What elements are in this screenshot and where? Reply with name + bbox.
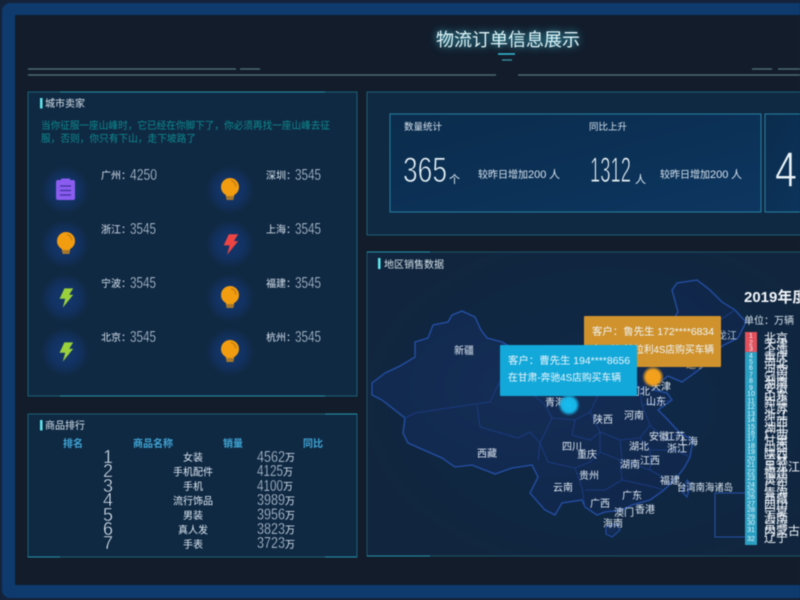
table rows: 2 <box>103 461 113 481</box>
city: 深圳 <box>206 166 321 214</box>
city: 广州: 广州： <box>101 170 131 182</box>
table rows: 7 <box>103 533 113 553</box>
table header: 排名 <box>63 437 83 450</box>
ranking names column: 台湾 <box>764 517 788 532</box>
table rows: 1 <box>103 447 113 467</box>
ranking names column: 福建 <box>764 465 788 480</box>
ranking unit: 单位：万辆 <box>744 314 794 327</box>
map: province labels: 福建 <box>660 474 680 487</box>
ranking index column: 7 <box>749 372 753 379</box>
tooltip: orange <box>584 316 721 367</box>
ranking names column: 河北 <box>764 357 788 371</box>
table rows: 3 <box>103 476 113 496</box>
table header: 销量 <box>223 437 243 450</box>
map marker: orange <box>642 366 664 388</box>
ranking names column: 吉林 <box>764 453 788 467</box>
table rows: 4100 <box>257 478 283 495</box>
table rows: 4562 <box>257 449 285 466</box>
map: province labels: 广东 <box>622 489 642 502</box>
ranking index column: 4 <box>749 353 753 360</box>
ranking names column: 广东 <box>764 479 788 493</box>
ranking names column: 浙江 <box>764 408 788 422</box>
city: 宁波: 3545 <box>130 275 156 292</box>
stat card <box>390 114 761 212</box>
stat: year on year: 200 <box>710 169 728 181</box>
tooltip: blue: 在甘肃-奔驰4S店购买车辆 <box>508 371 621 384</box>
city: 浙江 <box>41 220 156 268</box>
stat: quantity: 人 <box>549 168 560 181</box>
panel: product ranking <box>28 414 357 557</box>
table rows: 6 <box>103 519 113 539</box>
city: 北京: 北京： <box>101 331 131 344</box>
map: province labels: 黑龙江 <box>707 329 737 342</box>
map: province labels: 四川 <box>562 442 582 453</box>
ranking index column: 3 <box>749 346 753 353</box>
map: South China Sea inset <box>715 493 745 537</box>
ranking index column: 19 <box>747 449 755 456</box>
heading: product ranking: 商品排行 <box>45 419 85 432</box>
tooltip: blue: 客户：曹先生 194****8656 <box>508 354 630 367</box>
stat: year on year: 人 <box>635 173 646 186</box>
ranking index column: 15 <box>747 424 755 431</box>
map: province labels: 新疆 <box>454 344 474 357</box>
heading: city sellers: 城市卖家 <box>45 97 85 110</box>
city: 福建 <box>206 274 321 322</box>
ranking index column: 29 <box>747 514 755 521</box>
table rows: 4125 <box>257 463 283 480</box>
ranking index column: 5 <box>749 359 753 366</box>
ranking names column: 安徽 <box>764 381 788 396</box>
map: province labels: 西藏 <box>477 448 497 460</box>
map: province labels: 江苏 <box>665 430 685 443</box>
map: province labels: 云南 <box>553 481 573 494</box>
table rows: 3723 <box>257 535 285 552</box>
stat: quantity <box>403 121 560 190</box>
ranking names column <box>764 331 800 545</box>
ranking names column: 四川 <box>764 498 788 512</box>
ranking names column: 重庆 <box>764 350 788 364</box>
ranking index column: 1 <box>749 333 753 340</box>
ranking index column: 17 <box>747 436 755 443</box>
map: province labels: 天津 <box>651 381 671 393</box>
ranking index column: 22 <box>747 469 755 476</box>
map: province labels: 湖南 <box>620 458 640 471</box>
panel: statistics <box>367 92 800 235</box>
ranking names column: 西藏 <box>764 492 788 506</box>
city: 广州: 4250 <box>130 167 157 184</box>
ranking index column: 6 <box>749 365 753 372</box>
city: 杭州: 杭州： <box>266 331 296 344</box>
ranking names column: 广西 <box>764 428 788 442</box>
table rows: 万 <box>285 511 295 522</box>
city: 浙江: 3545 <box>130 221 156 238</box>
table rows: 真人发 <box>178 524 208 536</box>
ranking index column: 9 <box>749 385 753 392</box>
ranking names column: 宁夏 <box>764 504 788 519</box>
ranking names column: 湖北 <box>764 420 788 435</box>
city: 杭州: 3545 <box>295 329 321 346</box>
city: 宁波 <box>41 274 156 322</box>
table rows: 手表 <box>183 538 203 551</box>
ranking names column: 青海 <box>764 485 788 500</box>
table rows: 3823 <box>257 521 285 538</box>
map: province labels: 安徽 <box>649 430 669 443</box>
intro text: 当你征服一座山峰时，它已经在你脚下了，你必须再找一座山峰去征 <box>41 119 330 132</box>
ranking index column: 2 <box>749 340 753 347</box>
city: 浙江: 浙江： <box>101 224 131 236</box>
city: 北京: 3545 <box>130 329 156 346</box>
ranking index column: 21 <box>747 462 755 469</box>
stat: quantity: 个 <box>449 173 460 186</box>
map: Taiwan <box>682 480 691 497</box>
city: 上海: 3545 <box>295 221 321 238</box>
tooltip: orange: 客户：鲁先生 172****6834 <box>592 325 714 338</box>
map: province labels: 台湾南海诸岛 <box>677 481 733 494</box>
ranking index column: 13 <box>747 411 755 418</box>
ranking index column: 32 <box>747 536 755 543</box>
table rows: 3989 <box>257 492 285 509</box>
city: 深圳: 深圳： <box>266 170 296 182</box>
map: province labels: 河北 <box>630 386 650 398</box>
stat: quantity: 较昨日增加 <box>478 168 528 181</box>
table rows: 万 <box>285 496 295 508</box>
stat: quantity: 200 <box>528 169 546 181</box>
stat: quantity: 数量统计 <box>404 121 443 133</box>
stat: year on year: 人 <box>731 168 742 181</box>
table rows: 万 <box>285 453 295 464</box>
city: 上海 <box>206 220 321 268</box>
ranking index column: 14 <box>747 417 755 424</box>
table rows: 万 <box>285 526 295 536</box>
ranking names column: 黑龙江 <box>764 460 800 474</box>
intro text: 服，否则，你只有下山，走下坡路了 <box>41 132 196 145</box>
map: province labels: 贵州 <box>579 469 599 482</box>
ranking index column: 30 <box>747 520 755 527</box>
ranking index column: 23 <box>747 475 755 482</box>
table rows: 5 <box>103 505 113 525</box>
panel: regional sales <box>367 252 800 556</box>
intro text <box>41 119 330 145</box>
ranking index column: 16 <box>747 430 755 437</box>
map: province labels: 山东 <box>646 395 666 408</box>
ranking names column: 内蒙古 <box>764 523 800 538</box>
table rows: 流行饰品 <box>173 494 213 508</box>
ranking index column: 12 <box>747 404 755 411</box>
city: 福建: 3545 <box>295 275 321 292</box>
table header: 商品名称 <box>133 437 173 450</box>
heading: regional sales: 地区销售数据 <box>384 258 444 271</box>
table rows: 万 <box>285 540 295 551</box>
stat: year on year: 1312 <box>590 151 631 190</box>
map marker: blue <box>558 394 580 416</box>
ranking index column <box>745 332 757 545</box>
map: province labels: 上海 <box>678 435 698 448</box>
ranking index column: 8 <box>749 378 753 385</box>
table rows: 3956 <box>257 506 285 524</box>
stat: quantity: 365 <box>403 151 447 190</box>
ranking names column: 甘肃 <box>764 434 788 448</box>
ranking names column: 江西 <box>764 415 788 429</box>
tooltip: blue <box>500 345 637 396</box>
table rows: 万 <box>283 482 293 493</box>
table rows <box>103 447 295 553</box>
table header: 同比 <box>303 437 323 450</box>
panel: city sellers <box>28 92 357 396</box>
ranking names column: 河南 <box>764 362 788 377</box>
map: Hainan <box>606 524 620 537</box>
ranking index column: 28 <box>747 507 755 514</box>
ranking names column: 辽宁 <box>764 530 788 545</box>
city: 宁波: 宁波： <box>101 277 131 290</box>
map: province labels: 广西 <box>590 498 610 510</box>
map: province labels: 海南 <box>603 517 623 530</box>
ranking index column: 25 <box>747 488 755 495</box>
city: 深圳: 3545 <box>295 167 321 184</box>
table rows: 女装 <box>183 451 203 464</box>
map: province labels: 香港 <box>635 504 655 516</box>
ranking names column: 湖南 <box>764 375 788 390</box>
table header <box>63 437 323 450</box>
ranking index column: 11 <box>747 398 755 405</box>
map: province labels: 浙江 <box>667 443 687 455</box>
table rows: 万 <box>283 468 293 478</box>
table rows: 4 <box>103 490 113 510</box>
ranking index column: 24 <box>747 482 755 489</box>
map of China <box>372 280 746 537</box>
table rows: 男装 <box>183 509 203 522</box>
ranking names column: 新疆 <box>764 394 788 409</box>
ranking index column: 10 <box>747 391 755 398</box>
ranking index column: 31 <box>747 527 755 534</box>
city: 上海: 上海： <box>266 223 296 236</box>
ranking index column: 20 <box>747 456 755 463</box>
stat: year on year: 较昨日增加 <box>660 168 710 181</box>
map: province labels: 澳门 <box>614 506 634 519</box>
table rows: 手机配件 <box>173 466 213 478</box>
stat: year on year <box>589 121 742 190</box>
map: province labels: 重庆 <box>577 448 597 461</box>
stat card: clipped <box>765 114 800 212</box>
map: province labels: 青海 <box>545 396 565 409</box>
map: province labels: 陕西 <box>593 413 613 426</box>
city: 福建: 福建： <box>266 277 296 290</box>
ranking names column: 北京 <box>764 331 788 345</box>
map: province labels: 河南 <box>624 409 644 422</box>
table rows: 手机 <box>183 480 203 493</box>
map: province labels: 湖北 <box>629 441 649 453</box>
tooltip: orange: 在天津-法拉利4S店购买车辆 <box>592 343 714 356</box>
ranking index column: 27 <box>747 501 755 508</box>
ranking index column: 18 <box>747 443 755 450</box>
ranking names column: 天津 <box>764 337 788 351</box>
ranking names column: 陕西 <box>764 446 788 461</box>
ranking names column: 上海 <box>764 343 788 358</box>
map: province labels <box>454 329 737 530</box>
stat: year on year: 同比上升 <box>589 121 628 133</box>
ranking names column: 云南 <box>764 369 788 384</box>
ranking names column: 海南 <box>764 510 788 525</box>
city: 杭州 <box>206 328 321 376</box>
ranking names column: 山西 <box>764 440 788 454</box>
ranking names column: 江苏 <box>764 402 788 416</box>
ranking index column: 26 <box>747 494 755 501</box>
city: 广州 <box>41 166 157 214</box>
title: 物流订单信息展示 <box>436 30 580 50</box>
city: 北京 <box>41 328 156 376</box>
ranking names column: 贵州 <box>764 473 788 487</box>
map: province labels: 辽宁 <box>686 358 706 371</box>
ranking names column: 山东 <box>764 389 788 403</box>
map: province labels: 江西 <box>640 455 660 467</box>
